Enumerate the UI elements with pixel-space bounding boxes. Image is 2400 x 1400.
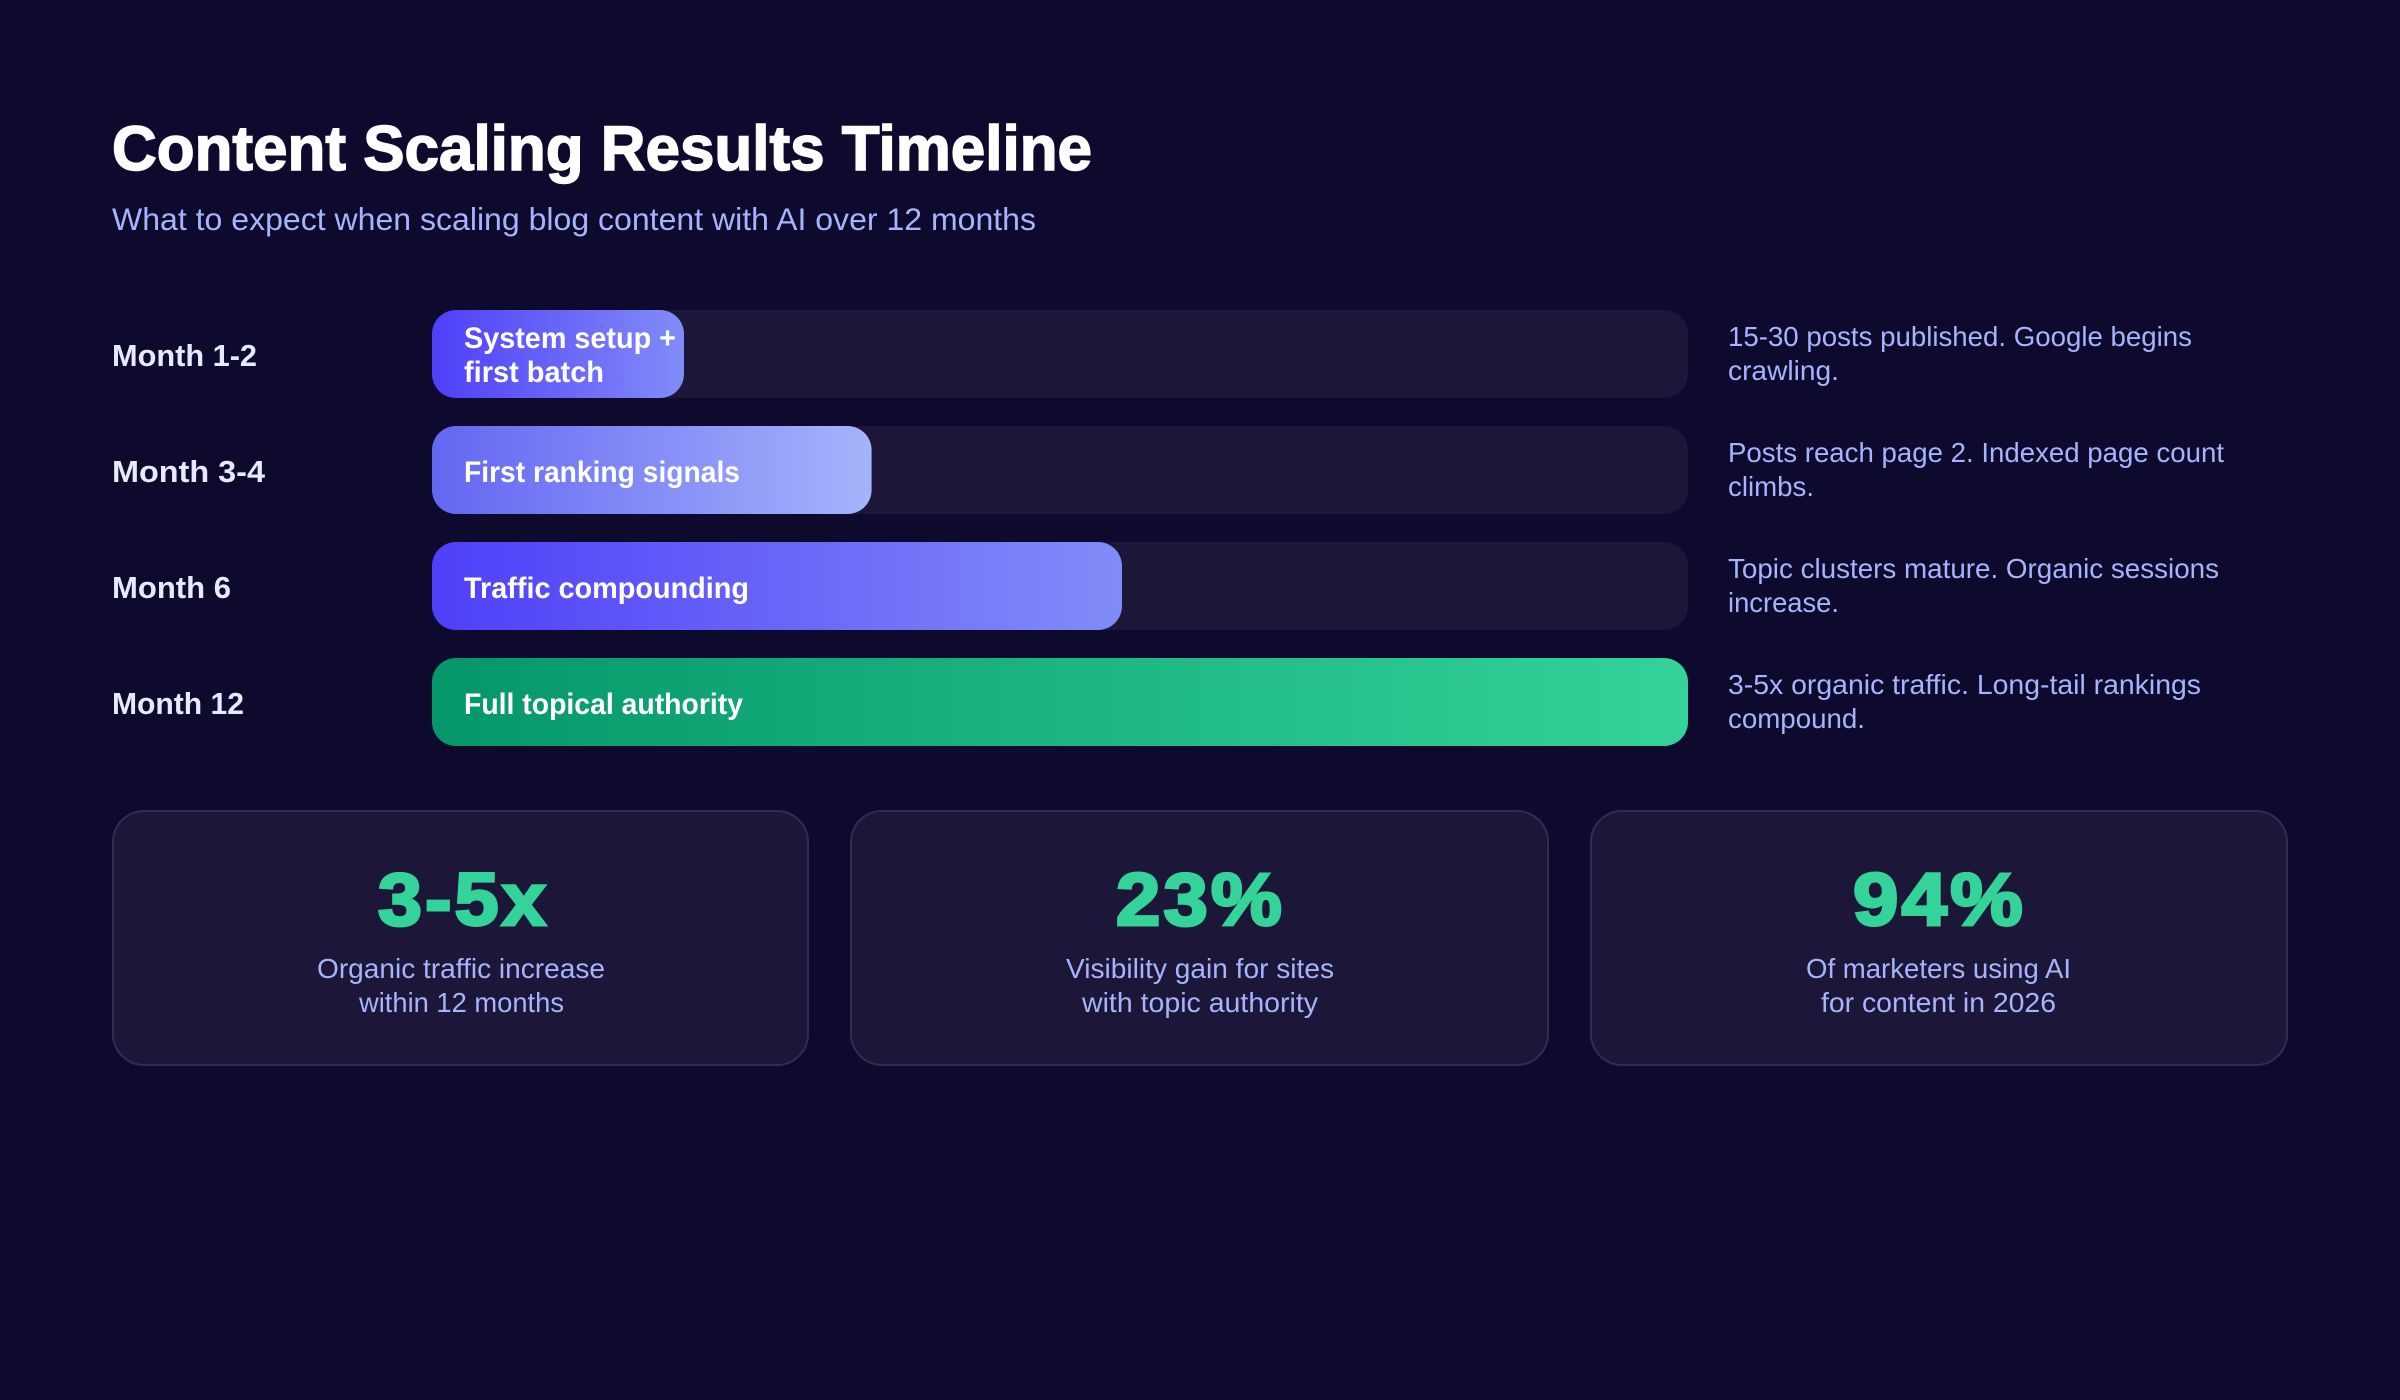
bar track: month 12 [432, 658, 1688, 746]
card background [1591, 811, 2287, 1065]
bar fill: traffic compounding [432, 542, 1122, 630]
stat description: Of marketers using AI [1806, 953, 2071, 984]
stat value: 23%: 23% [1116, 858, 1285, 941]
subtitle: What to expect when scaling blog content with AI over 12 months [112, 201, 1036, 237]
note: month 6: increase. [1728, 587, 1839, 618]
stat description: with topic authority [1081, 987, 1318, 1018]
note: month 1-2: 15-30 posts published. Google begins [1728, 321, 2192, 352]
note: month 6: Topic clusters mature. Organic sessions [1728, 553, 2219, 584]
row: month 3-4 [112, 426, 2224, 514]
bar fill: full topical authority [432, 658, 1688, 746]
bar track: month 3-4 [432, 426, 1688, 514]
card background [113, 811, 808, 1065]
bar label: traffic compounding: Traffic compounding [464, 572, 749, 605]
stat description: Visibility gain for sites [1066, 953, 1334, 984]
panel: stat card marketers using AI [1591, 811, 2287, 1065]
bar label: first ranking signals: First ranking signals [464, 456, 740, 489]
bar label: system setup: System setup + [464, 322, 676, 355]
panel: stat card visibility gain [851, 811, 1548, 1065]
stat description: Organic traffic increase [317, 953, 605, 984]
label: month 12: Month 12 [112, 686, 244, 721]
card background [851, 811, 1548, 1065]
row: month 1-2 [112, 310, 2192, 398]
note: month 1-2: crawling. [1728, 355, 1839, 386]
panel: timeline bar chart [112, 310, 2224, 746]
note: month 3-4: climbs. [1728, 471, 1814, 502]
stat description: for content in 2026 [1821, 987, 2056, 1018]
note: month 12: compound. [1728, 703, 1865, 734]
label: month 1-2: Month 1-2 [112, 338, 257, 373]
bar fill: first ranking signals [432, 426, 872, 514]
panel: stat card organic traffic [113, 811, 808, 1065]
bar track: month 6 [432, 542, 1688, 630]
row: month 12 [112, 658, 2201, 746]
row: month 6 [112, 542, 2219, 630]
stat value: 3-5x: 3-5x [378, 858, 549, 941]
bar fill: system setup [432, 310, 684, 398]
stat value: 94%: 94% [1853, 858, 2026, 941]
title: Content Scaling Results Timeline [112, 114, 1092, 184]
stat description: within 12 months [358, 987, 564, 1018]
bar track: month 1-2 [432, 310, 1688, 398]
note: month 12: 3-5x organic traffic. Long-tail rankings [1728, 669, 2201, 700]
bar label: system setup: first batch [464, 356, 604, 389]
label: month 6: Month 6 [112, 570, 231, 605]
label: month 3-4: Month 3-4 [112, 454, 266, 489]
note: month 3-4: Posts reach page 2. Indexed page count [1728, 437, 2224, 468]
bar label: full topical authority: Full topical authority [464, 688, 744, 721]
